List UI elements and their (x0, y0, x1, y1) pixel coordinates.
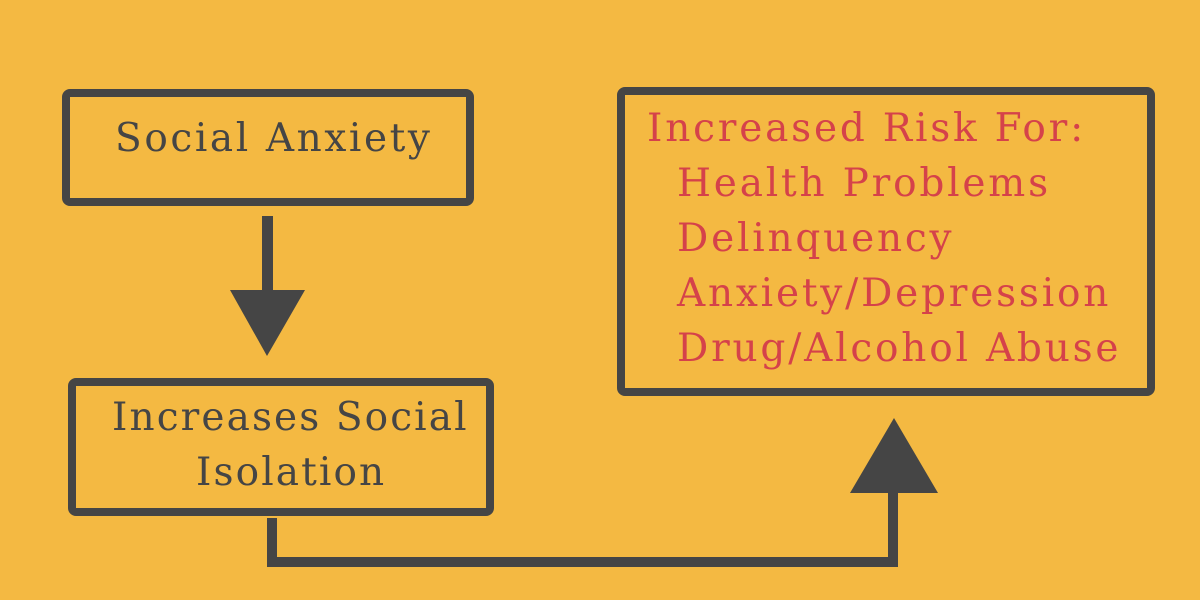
text: increased risk list: Delinquency (677, 216, 954, 261)
text: increased risk list: Health Problems (677, 161, 1051, 206)
text: increased risk list: Anxiety/Depression (677, 271, 1111, 316)
box: increased risk (617, 87, 1155, 396)
text: increases social isolation: Isolation (196, 450, 386, 495)
text: increases social isolation: Increases Social (112, 395, 469, 440)
text: increases social isolation (112, 395, 469, 495)
text: increased risk list (647, 106, 1121, 371)
box: increases social isolation (68, 378, 494, 516)
text: increased risk list: Increased Risk For: (647, 106, 1086, 151)
text: social anxiety: Social Anxiety (115, 116, 433, 161)
text: increased risk list: Drug/Alcohol Abuse (677, 326, 1121, 371)
arrow: down from social anxiety (230, 216, 305, 356)
box: social anxiety (62, 89, 474, 206)
arrow: isolation to risk (272, 418, 938, 562)
